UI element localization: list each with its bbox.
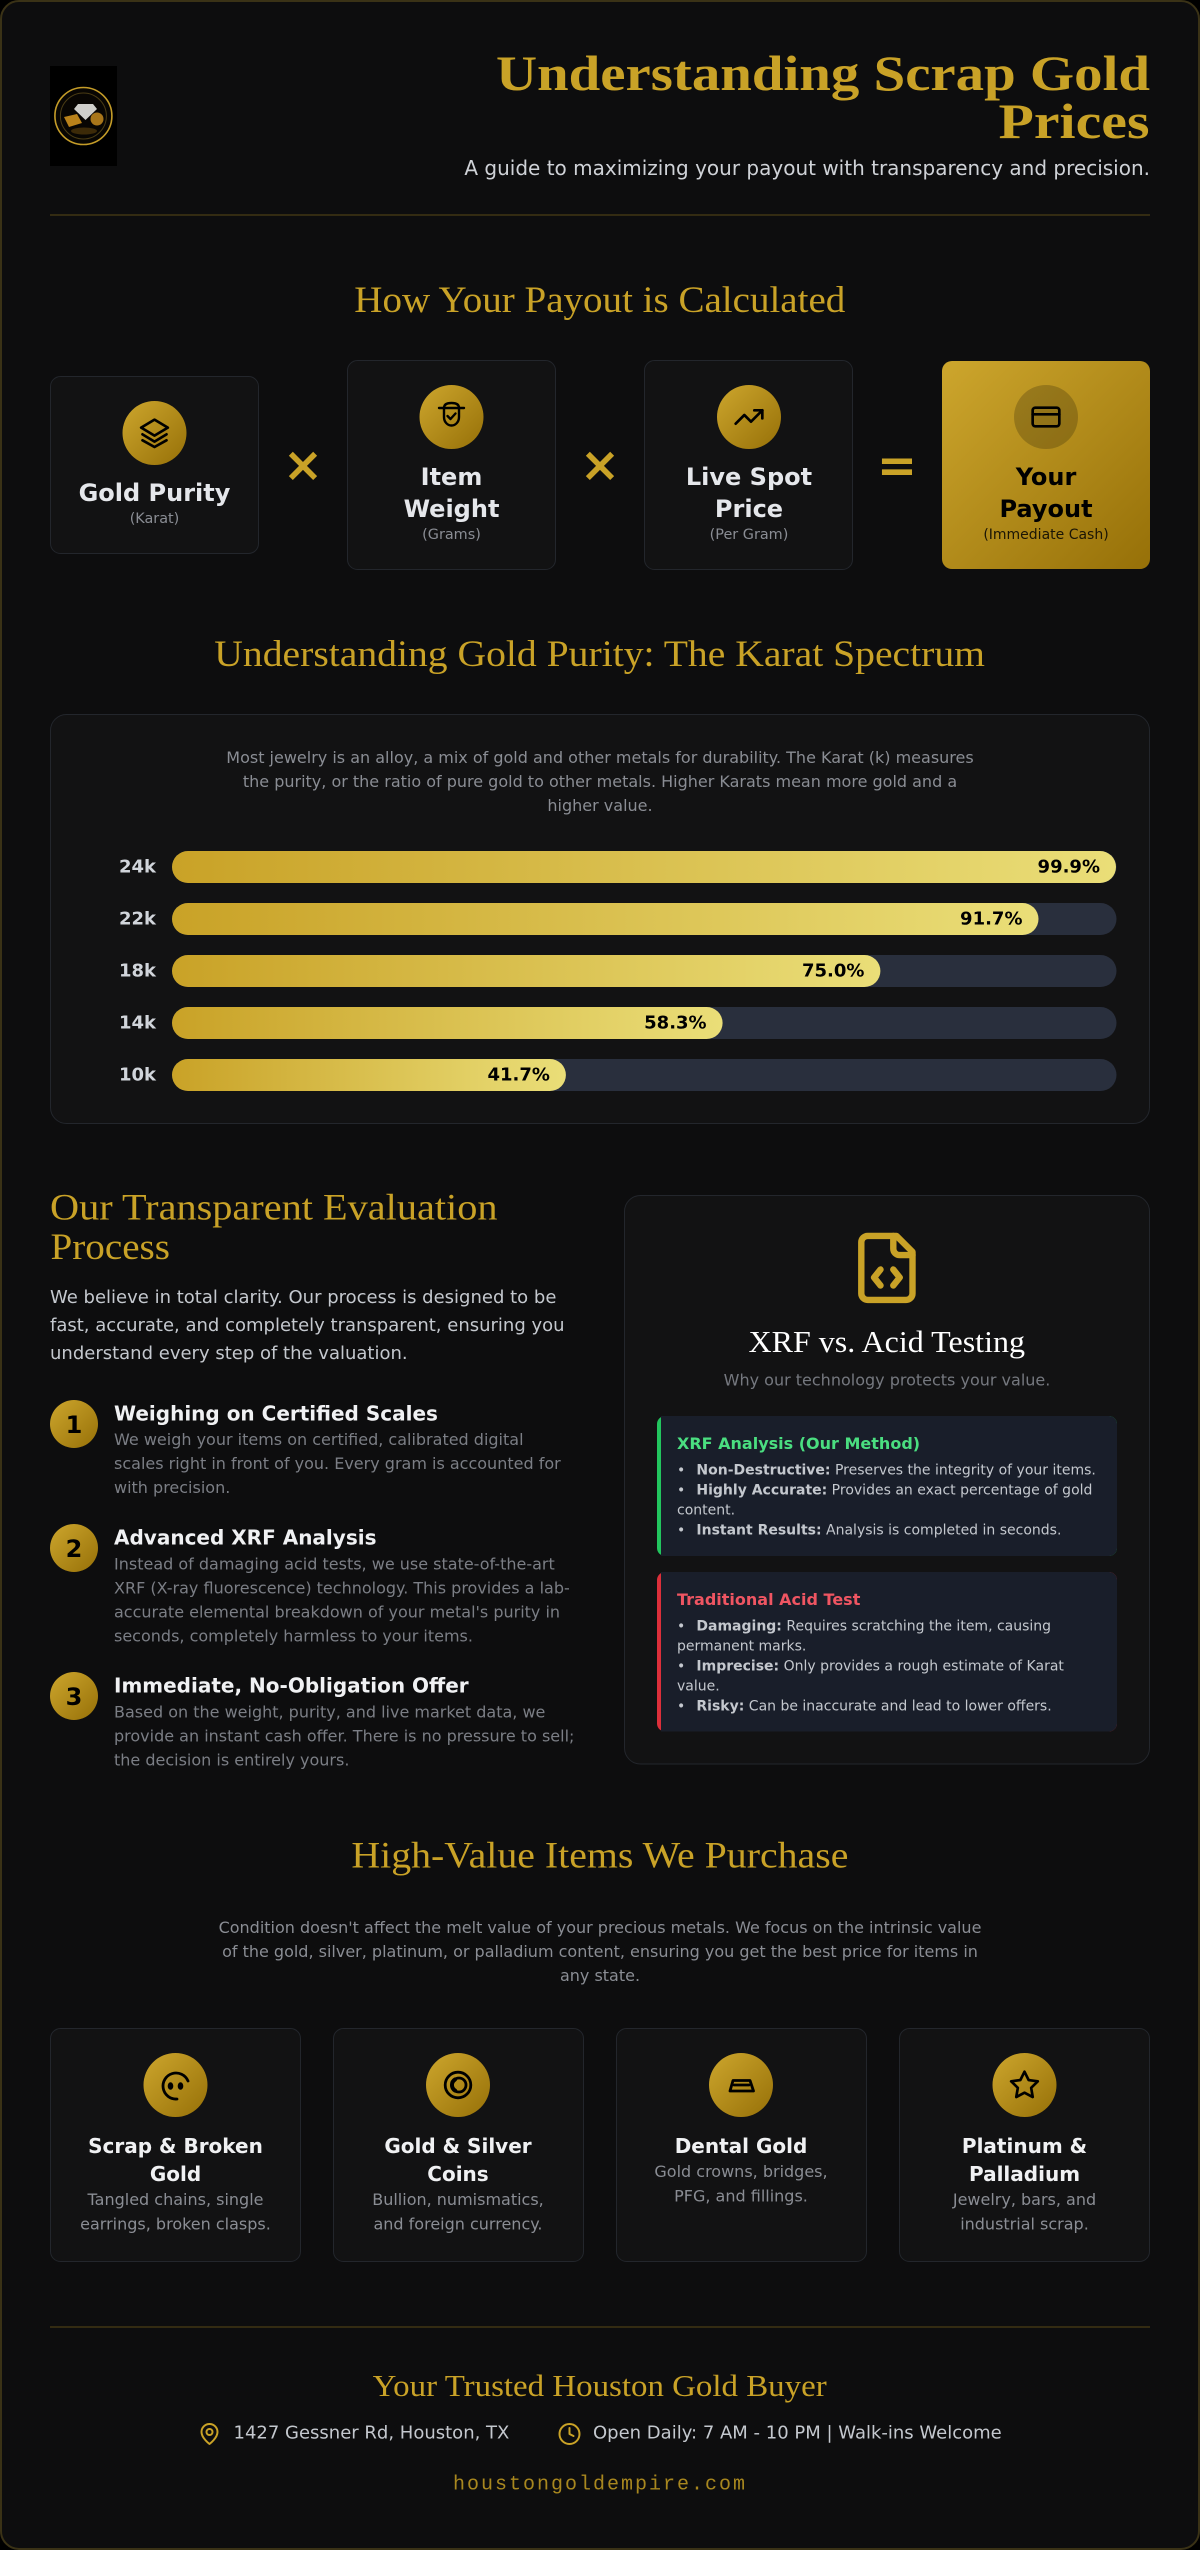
text: karat intro: the purity, or the ratio of pure gold to other metals. Higher Karats mean more gold and a (243, 772, 957, 791)
card: platinum and palladium (900, 2028, 1150, 2262)
bar: 14k: 58.3% (644, 1012, 707, 1034)
card: item weight: Weight (404, 495, 499, 523)
step 1: with precision. (114, 1478, 230, 1497)
bar: 18k: 75.0% (802, 960, 864, 982)
card: scrap and broken gold (50, 2028, 300, 2262)
icon: jewelry (163, 2073, 188, 2099)
card: gold and silver coins: Coins (427, 2162, 489, 2186)
card: platinum and palladium: industrial scrap. (960, 2214, 1089, 2234)
bar: 10k (119, 1059, 1116, 1091)
heading: high-value items: High-Value Items We Purchase (351, 1836, 848, 1876)
footer (202, 2368, 1002, 2496)
bar: 22k (119, 903, 1116, 935)
icon: scale (439, 403, 464, 426)
card: item weight (348, 360, 556, 570)
card: item weight: (Grams) (422, 527, 481, 543)
card: dental gold (616, 2028, 866, 2262)
icon: star (1011, 2072, 1038, 2097)
box: xrf analysis: Highly Accurate: (696, 1482, 827, 1498)
card: dental gold: Dental Gold (675, 2134, 807, 2158)
box: xrf analysis: Non-Destructive: (696, 1462, 831, 1478)
step 2: seconds, completely harmless to your items. (114, 1626, 473, 1646)
icon: trending up (736, 410, 762, 424)
bar: 22k: 22k (119, 908, 157, 930)
card: gold and silver coins: Gold & Silver (384, 2134, 532, 2158)
icon: layers (141, 420, 168, 447)
box: xrf analysis: content. (677, 1502, 735, 1518)
heading: xrf vs acid: XRF vs. Acid Testing (748, 1324, 1025, 1359)
card: live spot price: (Per Gram) (710, 527, 788, 543)
step 3 (50, 1672, 574, 1770)
card: live spot price (644, 360, 852, 570)
box: acid test: Requires scratching the item, causing (786, 1618, 1051, 1634)
text: karat intro: higher value. (547, 796, 653, 815)
panel: xrf vs acid testing (624, 1196, 1150, 1764)
step 3: Based on the weight, purity, and live market data, we (114, 1702, 545, 1722)
box: xrf analysis: Analysis is completed in seconds. (826, 1522, 1061, 1538)
evaluation process column (50, 1188, 574, 1770)
step 1: We weigh your items on certified, calibrated digital (114, 1430, 524, 1449)
card: scrap and broken gold: Scrap & Broken (88, 2134, 263, 2158)
bar: 24k (119, 851, 1116, 883)
step 2 (50, 1524, 570, 1646)
card: gold purity: Gold Purity (79, 479, 231, 507)
text: process intro: fast, accurate, and completely transparent, ensuring you (50, 1315, 565, 1336)
icon: credit card (1033, 408, 1059, 426)
card: your payout: (Immediate Cash) (983, 527, 1109, 543)
step 2: accurate elemental breakdown of your metal's purity in (114, 1602, 560, 1622)
title: Prices (998, 93, 1150, 149)
step 2: XRF (X-ray fluorescence) technology. This provides a lab- (114, 1578, 570, 1598)
text: items intro: Condition doesn't affect the melt value of your precious metals. We focus on the intrinsic value (219, 1918, 981, 1937)
text: items intro: any state. (560, 1966, 640, 1985)
card: scrap and broken gold: Tangled chains, single (87, 2190, 263, 2209)
step 3: the decision is entirely yours. (114, 1750, 349, 1770)
box: acid test: • (677, 1698, 685, 1714)
bar: 24k: 24k (119, 856, 157, 878)
box: xrf analysis (657, 1416, 1117, 1556)
box: acid test: • (677, 1618, 685, 1634)
step 1: scales right in front of you. Every gram is accounted for (114, 1454, 561, 1473)
step 3: provide an instant cash offer. There is no pressure to sell; (114, 1726, 574, 1746)
box: xrf analysis: XRF Analysis (Our Method) (677, 1434, 920, 1453)
title: Understanding Scrap Gold (496, 45, 1150, 101)
item cards (50, 2028, 1150, 2262)
website: houstongoldempire.com (453, 2474, 747, 2496)
box: acid test: permanent marks. (677, 1638, 806, 1654)
bar: 24k: 99.9% (1038, 856, 1100, 878)
card: gold and silver coins: and foreign currency. (373, 2214, 543, 2234)
heading: evaluation process: Process (50, 1227, 170, 1268)
text: process intro: understand every step of the valuation. (50, 1343, 408, 1364)
card: gold purity: (Karat) (130, 511, 179, 527)
card: scrap and broken gold: earrings, broken clasps. (80, 2214, 271, 2234)
card: gold purity (50, 376, 258, 554)
subtitle: A guide to maximizing your payout with transparency and precision. (464, 156, 1150, 180)
card: live spot price: Price (715, 495, 783, 523)
icon: clock (560, 2424, 580, 2444)
bar: 22k: 91.7% (960, 908, 1022, 930)
bar: 14k: 14k (119, 1012, 157, 1034)
text: items intro: of the gold, silver, platinum, or palladium content, ensuring you get the best price for items in (222, 1942, 978, 1961)
card: dental gold: Gold crowns, bridges, (654, 2162, 828, 2181)
heading: karat spectrum: Understanding Gold Purity: The Karat Spectrum (214, 634, 985, 675)
title (496, 45, 1150, 149)
subheading: Why our technology protects your value. (724, 1370, 1050, 1390)
bar: 10k: 10k (119, 1064, 157, 1086)
bar: 18k: 18k (119, 960, 157, 982)
step 1: Weighing on Certified Scales (114, 1402, 438, 1426)
bar: 18k (119, 955, 1116, 987)
box: xrf analysis: • (677, 1522, 685, 1538)
box: xrf analysis: • (677, 1482, 685, 1498)
step 3: 3 (66, 1683, 82, 1711)
text: karat intro (226, 748, 974, 815)
heading: evaluation process: Our Transparent Evaluation (50, 1188, 498, 1228)
operator: times: × (580, 437, 620, 493)
box: acid test: Can be inaccurate and lead to lower offers. (749, 1698, 1052, 1714)
operator: equals: = (877, 438, 917, 494)
bar chart (119, 851, 1116, 1091)
box: xrf analysis: Preserves the integrity of your items. (835, 1462, 1096, 1478)
text: process intro (50, 1287, 565, 1364)
step 2: Instead of damaging acid tests, we use state-of-the-art (114, 1554, 555, 1574)
box: xrf analysis: Provides an exact percentage of gold (832, 1482, 1092, 1498)
step 1: 1 (66, 1411, 82, 1439)
hours: Open Daily: 7 AM - 10 PM | Walk-ins Welcome (593, 2422, 1002, 2444)
box: xrf analysis: • (677, 1462, 685, 1478)
operator: times: × (283, 437, 323, 493)
box: acid test: Only provides a rough estimate of Karat (784, 1658, 1064, 1674)
text: karat intro: Most jewelry is an alloy, a mix of gold and other metals for durability. The Karat (k) measures (226, 748, 974, 767)
panel: karat spectrum (50, 714, 1150, 1124)
box: acid test: Risky: (696, 1698, 744, 1714)
text: items intro (219, 1918, 981, 1985)
card: your payout: Your (1015, 463, 1076, 491)
step 1 (50, 1400, 561, 1497)
step 2: Advanced XRF Analysis (114, 1526, 376, 1550)
card: gold and silver coins: Bullion, numismatics, (372, 2190, 544, 2209)
box: xrf analysis: Instant Results: (696, 1522, 822, 1538)
card: dental gold: PFG, and fillings. (674, 2186, 808, 2206)
header (50, 45, 1150, 180)
bar: 14k (119, 1007, 1116, 1039)
step 3: Immediate, No-Obligation Offer (114, 1674, 469, 1698)
icon: coin (445, 2072, 471, 2098)
box: acid test: • (677, 1658, 685, 1674)
icon: map pin (202, 2424, 218, 2444)
card: platinum and palladium: Platinum & (962, 2134, 1087, 2158)
card: gold and silver coins (334, 2028, 584, 2262)
heading: how your payout is calculated: How Your Payout is Calculated (354, 280, 846, 321)
heading: evaluation process (50, 1188, 498, 1268)
step 2: 2 (66, 1535, 82, 1563)
footer heading: Your Trusted Houston Gold Buyer (373, 2368, 827, 2403)
card: live spot price: Live Spot (686, 463, 812, 491)
logo (50, 66, 117, 166)
icon: dental (730, 2080, 754, 2091)
box: acid test: Damaging: (696, 1618, 782, 1634)
card: platinum and palladium: Palladium (969, 2162, 1080, 2186)
bar: 10k: 41.7% (487, 1064, 550, 1086)
card: your payout (942, 361, 1150, 569)
box: acid test: Traditional Acid Test (677, 1590, 861, 1609)
card: platinum and palladium: Jewelry, bars, and (952, 2190, 1096, 2209)
formula (50, 360, 1150, 570)
icon: file code (861, 1236, 912, 1300)
box: acid test: Imprecise: (696, 1658, 779, 1674)
text: process intro: We believe in total clarity. Our process is designed to be (50, 1287, 556, 1308)
box: acid test (657, 1572, 1117, 1732)
card: item weight: Item (421, 463, 482, 491)
box: acid test: value. (677, 1678, 720, 1694)
card: scrap and broken gold: Gold (150, 2162, 201, 2186)
card: your payout: Payout (999, 495, 1093, 523)
address: 1427 Gessner Rd, Houston, TX (234, 2422, 509, 2444)
